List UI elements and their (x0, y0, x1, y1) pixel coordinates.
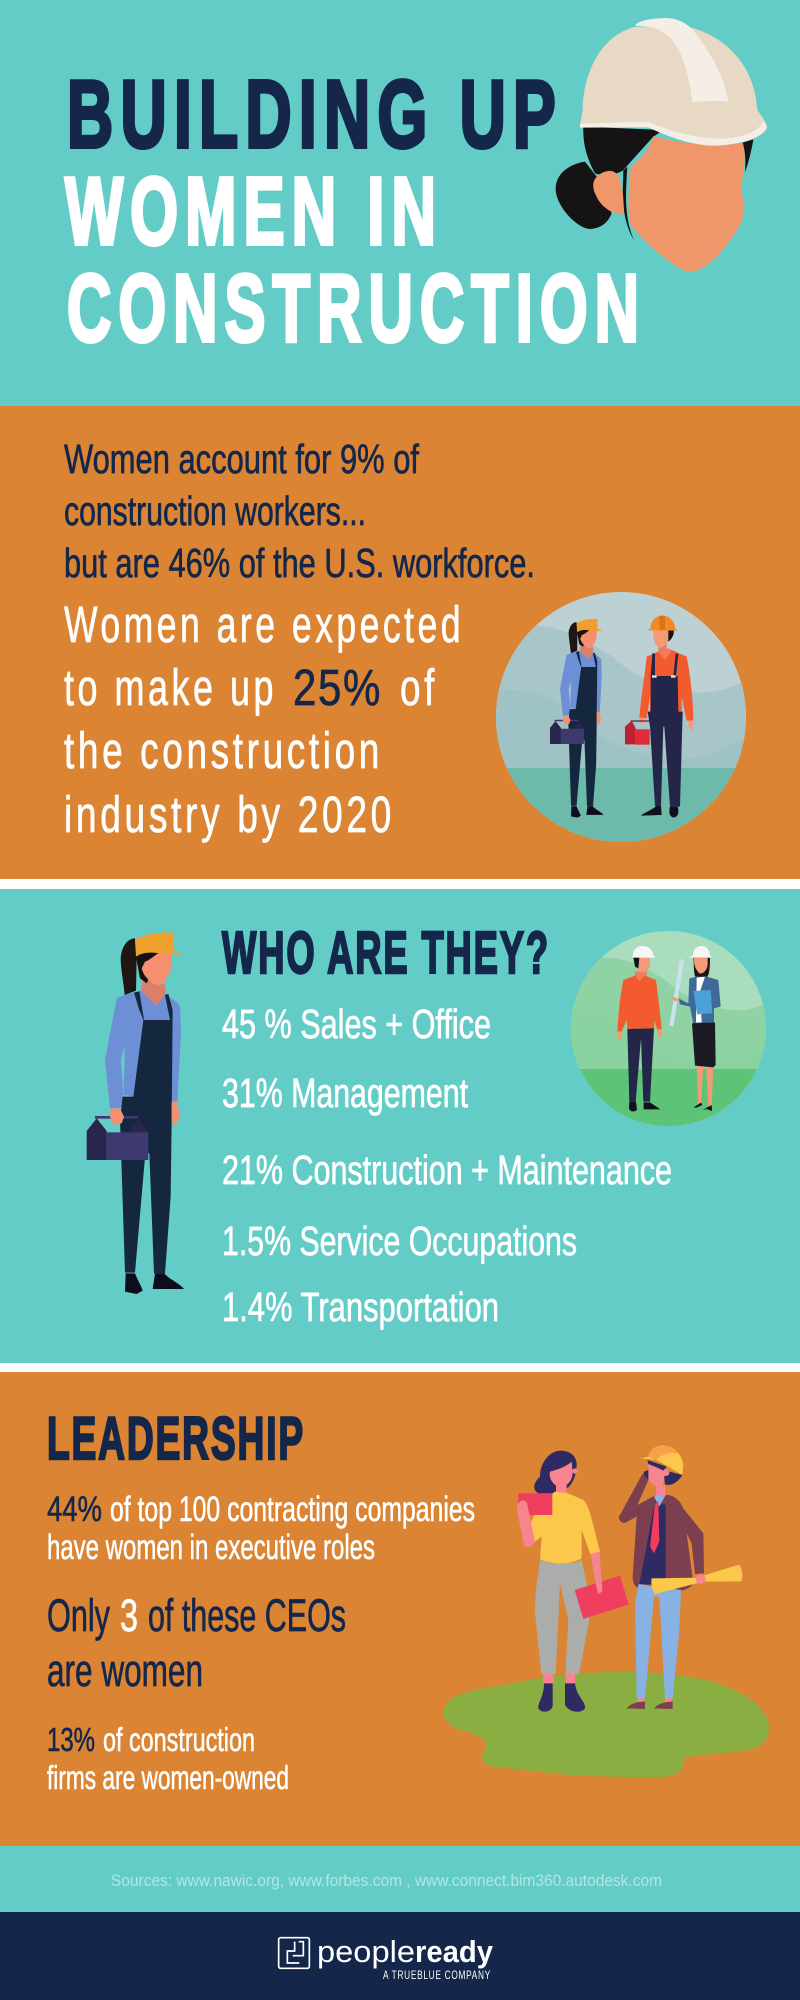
logo: peopleready: ready (415, 1934, 494, 1969)
heading: leadership: LEADERSHIP (47, 1405, 305, 1472)
text: workforce share: but are 46% of the U.S. workforce. (64, 540, 535, 586)
heading: who are they: WHO ARE THEY? (222, 920, 550, 986)
panel: footer background (0, 1912, 800, 2000)
panel: header background (0, 0, 800, 406)
logo: peopleready: people (317, 1934, 415, 1969)
list: occupations: 1.4% Transportation (222, 1284, 499, 1330)
text: women-owned firms stat: 13% (47, 1721, 95, 1758)
text: sources: Sources: www.nawic.org, www.forbes.com , www.connect.bim360.autodesk.com (111, 1871, 662, 1890)
text: workforce share: construction workers... (64, 488, 366, 534)
text: 2020 projection: to make up (64, 659, 277, 716)
figure: man on phone with roll (619, 1445, 742, 1709)
illustration: engineer and manager in circle (565, 931, 772, 1129)
list: occupations: 1.5% Service Occupations (222, 1218, 577, 1264)
text: executive roles stat (47, 1490, 475, 1567)
illustration: ground patch (443, 1672, 769, 1777)
text: women-owned firms stat: firms are women-owned (47, 1759, 289, 1796)
figure: woman with folders (517, 1451, 629, 1712)
text: CEO stat: are women (47, 1645, 203, 1696)
text: executive roles stat: 44% (47, 1490, 102, 1529)
text: women-owned firms stat (47, 1721, 289, 1796)
text: women-owned firms stat: of construction (103, 1721, 255, 1758)
illustration: two workers in circle (490, 592, 750, 848)
icon: woman's head with hard hat (556, 18, 767, 272)
text: CEO stat (47, 1590, 346, 1696)
text: 2020 projection: 25% (293, 659, 382, 716)
text: CEO stat: of these CEOs (148, 1590, 346, 1641)
figure: man in overalls (625, 616, 693, 818)
logo: peopleready (279, 1934, 494, 1982)
list: occupations (222, 1001, 672, 1330)
title (65, 61, 646, 362)
icon: logo mark (279, 1938, 309, 1968)
text: 2020 projection (64, 596, 464, 843)
text: workforce share: Women account for 9% of (64, 436, 419, 482)
panel: leadership background (0, 1372, 800, 1846)
panel: sources background (0, 1846, 800, 1912)
logo: peopleready: A TRUEBLUE COMPANY (383, 1970, 491, 1982)
figure: man in white hard hat (617, 946, 662, 1111)
text: 2020 projection: industry by 2020 (64, 786, 395, 843)
text: CEO stat: 3 (120, 1590, 138, 1641)
figure: woman in overalls, small (550, 619, 603, 818)
text: executive roles stat: of top 100 contracting companies (110, 1490, 475, 1529)
text: workforce share (64, 436, 535, 586)
text: 2020 projection: Women are expected (64, 596, 464, 653)
panel: statistics background (0, 406, 800, 879)
text: 2020 projection: the construction (64, 722, 383, 779)
figure: woman with blueprint roll (669, 946, 721, 1111)
title: WOMEN IN (65, 158, 443, 265)
figure: woman in overalls, large (87, 932, 184, 1294)
text: executive roles stat: have women in executive roles (47, 1528, 375, 1567)
title: BUILDING UP (67, 61, 563, 168)
panel: who are they background (0, 889, 800, 1363)
list: occupations: 31% Management (222, 1070, 468, 1116)
text: CEO stat: Only (47, 1590, 110, 1641)
list: occupations: 45 % Sales + Office (222, 1001, 491, 1047)
text: 2020 projection: of (400, 659, 438, 716)
